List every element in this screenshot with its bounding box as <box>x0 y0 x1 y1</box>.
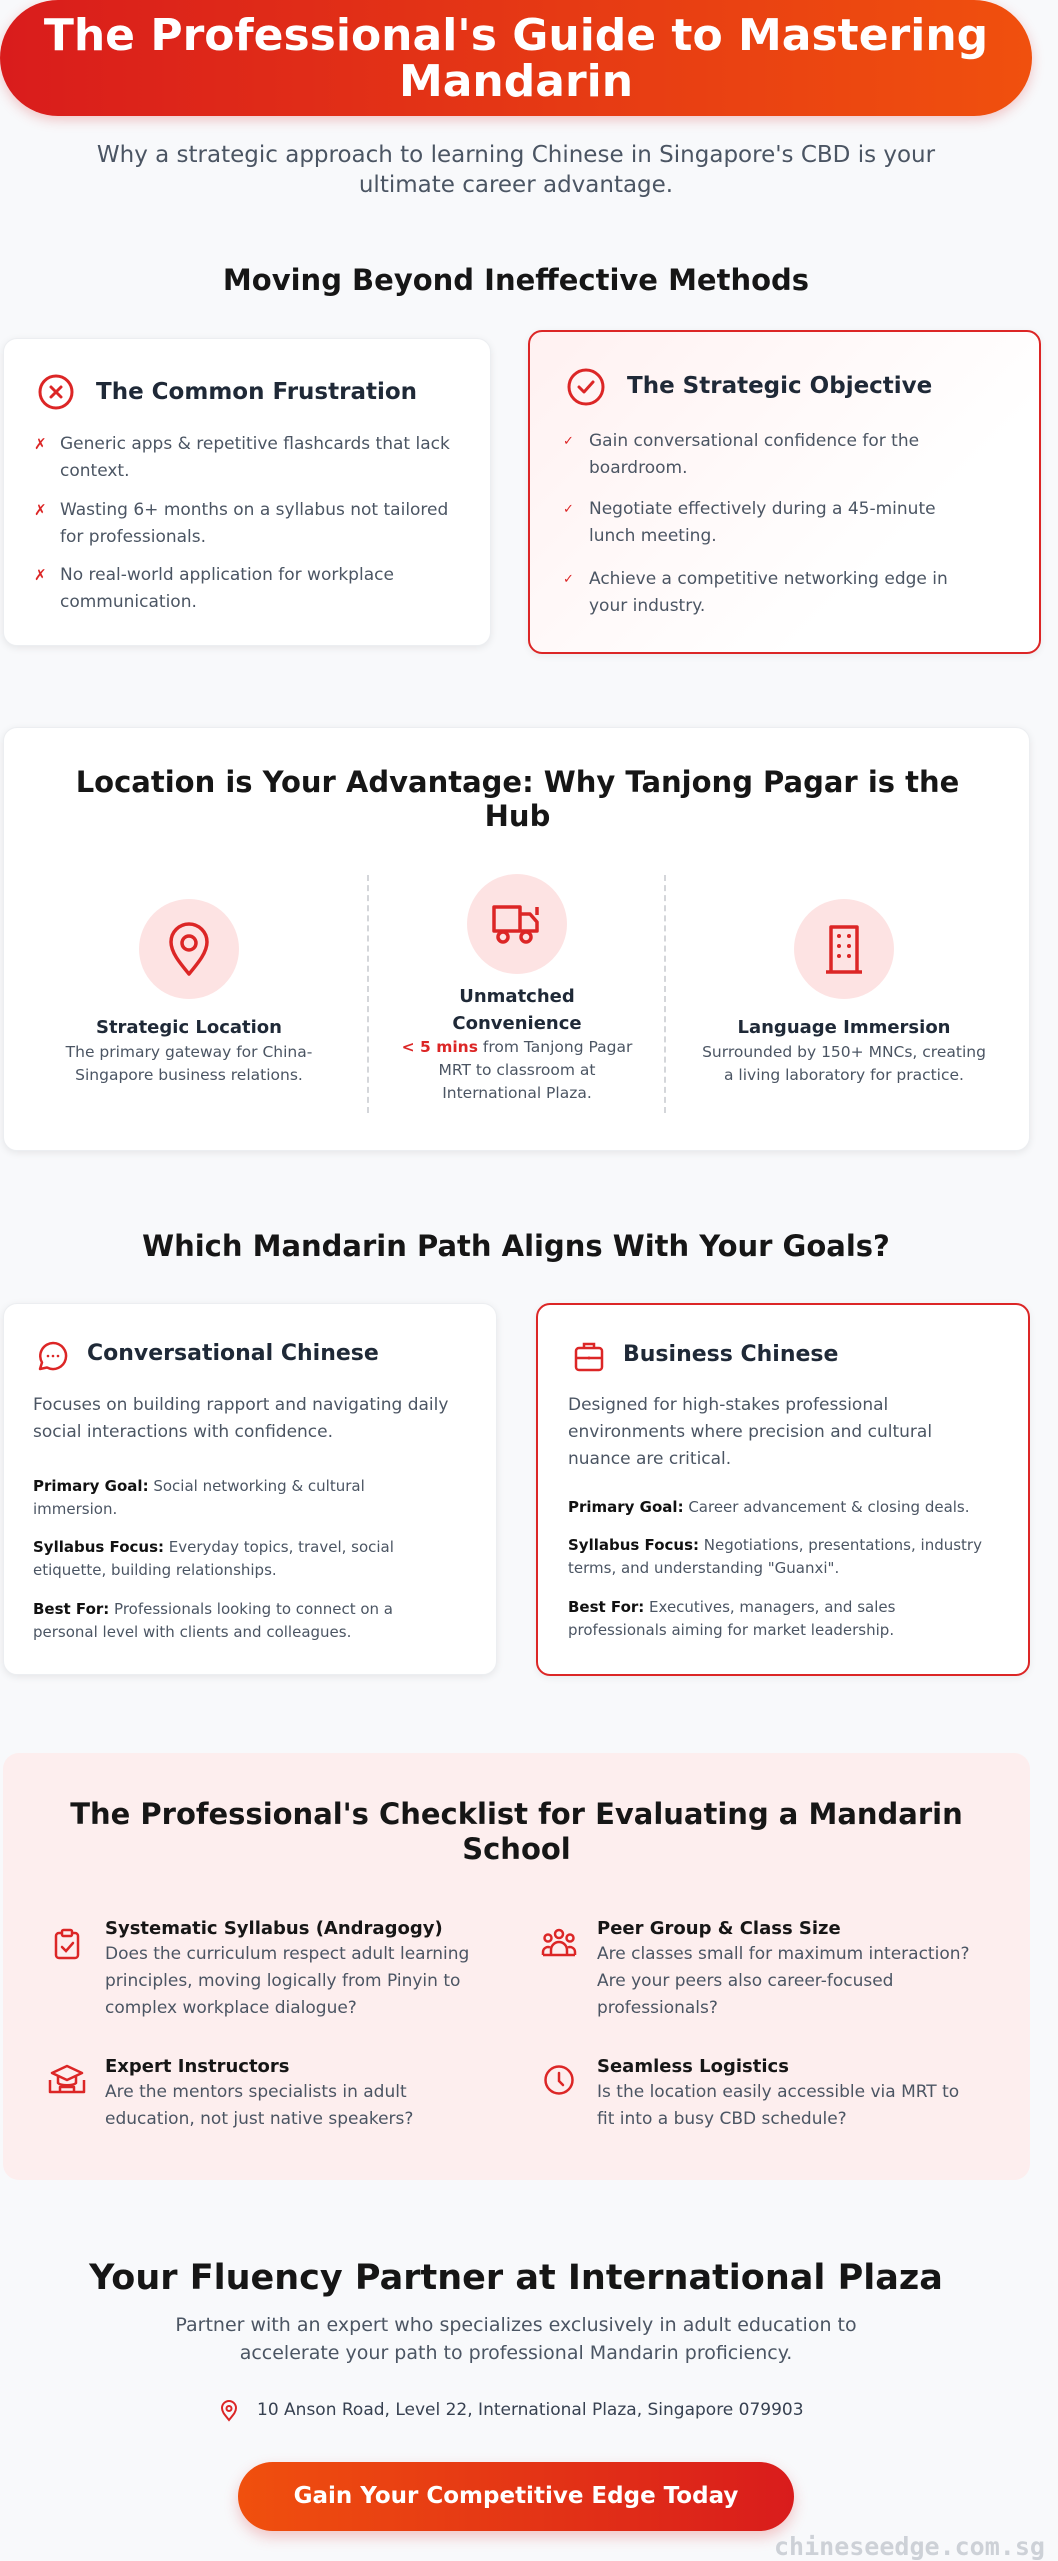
heading <box>70 1797 963 1866</box>
column: immersion: Surrounded by 150+ MNCs, creating <box>702 1043 986 1061</box>
heading: fluency partner: Your Fluency Partner at International Plaza <box>89 2258 943 2298</box>
heading: The Professional's Checklist for Evaluating a Mandarin <box>70 1797 963 1831</box>
item: syllabus: complex workplace dialogue? <box>105 1998 357 2018</box>
button: CTA: Gain Your Competitive Edge Today <box>294 2483 738 2509</box>
list <box>34 434 450 612</box>
list: boardroom. <box>589 458 687 478</box>
subtitle <box>97 142 936 198</box>
heading: which path: Which Mandarin Path Aligns With Your Goals? <box>142 1229 890 1263</box>
column: strategic location <box>66 899 312 1084</box>
description: Designed for high-stakes professional <box>568 1395 888 1415</box>
icon: train <box>467 874 567 974</box>
column: convenience: Unmatched <box>459 986 575 1007</box>
list: No real-world application for workplace <box>60 565 394 585</box>
heading: Location is Your Advantage: Why Tanjong Pagar is the <box>76 765 959 799</box>
text: partner paragraph <box>175 2314 857 2364</box>
list: for professionals. <box>60 527 206 547</box>
item: instructors: education, not just native speakers? <box>105 2109 413 2129</box>
address: 10 Anson Road, Level 22, International Plaza, Singapore 079903 <box>257 2400 804 2420</box>
details: Best For: Professionals looking to connect on a <box>33 1600 393 1618</box>
item: syllabus: principles, moving logically from Pinyin to <box>105 1971 460 1991</box>
item: peer group: Peer Group & Class Size <box>597 1918 841 1939</box>
description <box>33 1395 448 1442</box>
item: logistics <box>544 2056 959 2129</box>
list <box>563 431 948 616</box>
details: personal level with clients and colleagues. <box>33 1623 351 1641</box>
item: logistics: Seamless Logistics <box>597 2056 789 2077</box>
list: your industry. <box>589 596 705 616</box>
details <box>568 1498 982 1639</box>
details: Syllabus Focus: Everyday topics, travel, social <box>33 1538 394 1556</box>
list: Wasting 6+ months on a syllabus not tailored <box>60 500 448 520</box>
item: peer group: Are your peers also career-focused <box>597 1971 893 1991</box>
description: environments where precision and cultural <box>568 1422 932 1442</box>
card heading: The Strategic Objective <box>627 373 932 399</box>
item: instructors: Expert Instructors <box>105 2056 290 2077</box>
list: Achieve a competitive networking edge in <box>589 569 948 589</box>
column: convenience: Convenience <box>452 1013 582 1034</box>
icon: building <box>794 899 894 999</box>
item: logistics: Is the location easily accessible via MRT to <box>597 2082 959 2102</box>
icon: people <box>542 1928 576 1956</box>
description: Focuses on building rapport and navigating daily <box>33 1395 448 1415</box>
item: peer group: Are classes small for maximum interaction? <box>597 1944 970 1964</box>
description: social interactions with confidence. <box>33 1422 333 1442</box>
item: instructors: Are the mentors specialists in adult <box>105 2082 407 2102</box>
title <box>44 10 988 107</box>
list: context. <box>60 461 129 481</box>
item: syllabus <box>54 1918 469 2018</box>
button: CTA <box>238 2462 794 2531</box>
icon: clipboard <box>54 1928 80 1960</box>
icon: briefcase <box>574 1342 604 1372</box>
icon: clock <box>544 2065 574 2095</box>
title: Mandarin <box>399 56 633 107</box>
details: Primary Goal: Social networking & cultural <box>33 1477 365 1495</box>
column: convenience: International Plaza. <box>442 1084 592 1102</box>
panel: business chinese <box>536 1303 1030 1676</box>
column: immersion <box>702 899 986 1084</box>
text: partner paragraph: accelerate your path to professional Mandarin proficiency. <box>240 2342 792 2364</box>
icon: teacher <box>48 2064 86 2094</box>
list: Gain conversational confidence for the <box>589 431 919 451</box>
column: immersion: a living laboratory for practice. <box>724 1066 964 1084</box>
column: convenience: MRT to classroom at <box>438 1061 595 1079</box>
text: partner paragraph: Partner with an expert who specializes exclusively in adult education to <box>175 2314 857 2336</box>
list: ✓ <box>563 572 574 587</box>
item: logistics: fit into a busy CBD schedule? <box>597 2109 847 2129</box>
list: ✗ <box>34 501 47 519</box>
icon: map pin <box>139 899 239 999</box>
item: instructors <box>48 2056 413 2129</box>
list: ✗ <box>34 566 47 584</box>
panel: strategic objective <box>528 330 1041 654</box>
list: communication. <box>60 592 197 612</box>
list: Generic apps & repetitive flashcards that lack <box>60 434 450 454</box>
details: etiquette, building relationships. <box>33 1561 277 1579</box>
panel: conversational chinese <box>3 1303 497 1675</box>
details: Best For: Executives, managers, and sales <box>568 1598 895 1616</box>
list: Negotiate effectively during a 45-minute <box>589 499 936 519</box>
details: terms, and understanding "Guanxi". <box>568 1559 839 1577</box>
item: peer group: professionals? <box>597 1998 718 2018</box>
subtitle: Why a strategic approach to learning Chinese in Singapore's CBD is your <box>97 142 935 168</box>
item: peer group <box>542 1918 970 2018</box>
icon: pin <box>221 2400 237 2422</box>
item: syllabus: Systematic Syllabus (Andragogy) <box>105 1918 443 1939</box>
description <box>568 1395 932 1469</box>
divider <box>664 875 666 1113</box>
column: strategic location: Singapore business relations. <box>75 1066 303 1084</box>
card title: Conversational Chinese <box>87 1341 379 1366</box>
list: ✗ <box>34 435 47 453</box>
column: immersion: Language Immersion <box>738 1017 950 1038</box>
watermark: chineseedge.com.sg <box>774 2532 1045 2561</box>
column: convenience <box>402 874 632 1102</box>
subtitle: ultimate career advantage. <box>359 172 673 198</box>
header banner <box>0 0 1032 116</box>
details: Syllabus Focus: Negotiations, presentations, industry <box>568 1536 982 1554</box>
heading: School <box>462 1832 571 1866</box>
column: strategic location: The primary gateway for China- <box>66 1043 312 1061</box>
panel: location advantage <box>3 727 1030 1151</box>
column: strategic location: Strategic Location <box>96 1017 282 1038</box>
list: ✓ <box>563 502 574 517</box>
panel: common frustration <box>3 338 491 646</box>
card title: Business Chinese <box>623 1342 838 1367</box>
details: immersion. <box>33 1500 117 1518</box>
details: professionals aiming for market leadership. <box>568 1621 894 1639</box>
list: lunch meeting. <box>589 526 717 546</box>
description: nuance are critical. <box>568 1449 731 1469</box>
icon: x circle <box>38 374 74 410</box>
item: syllabus: Does the curriculum respect adult learning <box>105 1944 469 1964</box>
icon: chat bubble <box>38 1342 68 1370</box>
divider <box>367 875 369 1113</box>
list: ✓ <box>563 434 574 449</box>
panel: checklist <box>3 1753 1030 2180</box>
heading: moving beyond: Moving Beyond Ineffective Methods <box>223 263 809 297</box>
title: The Professional's Guide to Mastering <box>44 10 988 61</box>
heading <box>76 765 959 833</box>
card heading: The Common Frustration <box>96 379 417 405</box>
heading: Hub <box>485 799 550 833</box>
icon: check circle <box>568 368 604 406</box>
details <box>33 1477 394 1641</box>
details: Primary Goal: Career advancement & closing deals. <box>568 1498 970 1516</box>
column: convenience: < 5 mins from Tanjong Pagar <box>402 1038 632 1056</box>
